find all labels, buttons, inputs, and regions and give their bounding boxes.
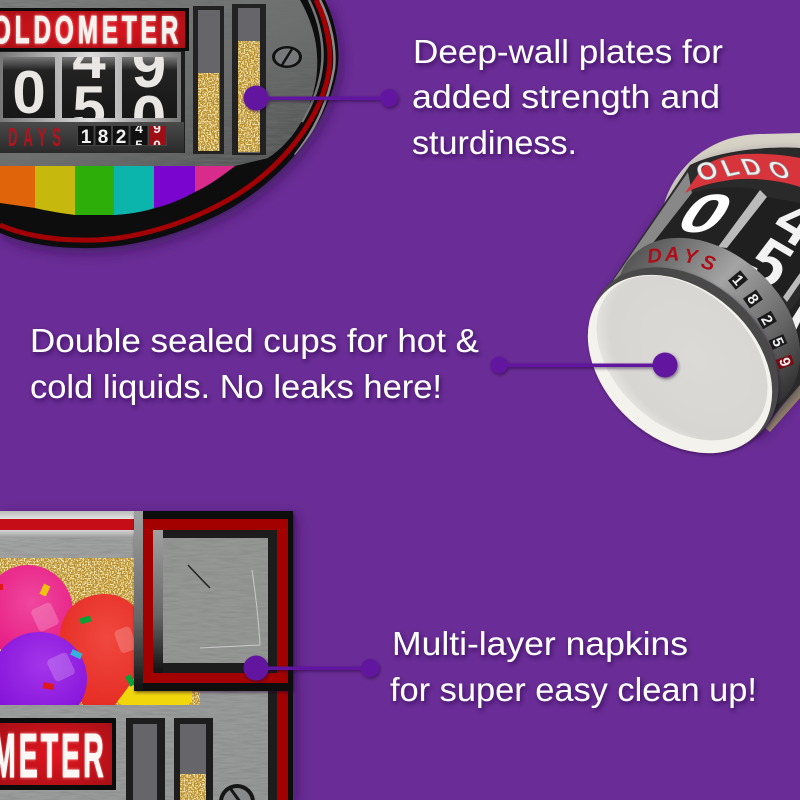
odometer digits xyxy=(0,52,181,122)
counter housing xyxy=(0,50,185,153)
text block xyxy=(412,33,723,161)
small counter: 5 xyxy=(768,335,787,349)
panel: cup xyxy=(587,133,800,456)
small counter: 0 xyxy=(153,137,161,153)
days label xyxy=(0,122,184,153)
odometer digits: 5 xyxy=(72,74,106,141)
balloon highlights xyxy=(30,601,138,683)
balloon: pink xyxy=(0,565,72,650)
text: DAYS: DAYS xyxy=(646,244,719,276)
cup rim xyxy=(660,133,800,228)
confetti xyxy=(0,584,136,690)
odometer digits: 4 xyxy=(72,24,106,91)
small counter: 9 xyxy=(153,120,161,136)
balloon: yellow xyxy=(117,680,192,705)
corner plate xyxy=(134,511,293,691)
small counter: 1 xyxy=(728,272,747,289)
tray frame xyxy=(0,511,293,800)
days band xyxy=(581,202,800,452)
small counter: 1 xyxy=(81,127,92,148)
text block: Deep-wall plates for xyxy=(413,33,723,70)
text: OLDO: O xyxy=(692,156,723,187)
small counter: 8 xyxy=(98,127,108,148)
small counter: 9 xyxy=(775,355,794,369)
plate rim xyxy=(0,0,338,248)
balloon: red xyxy=(60,594,134,705)
small counter: 4 xyxy=(135,120,143,136)
balloons xyxy=(0,565,192,705)
text block: Double sealed cups for hot & xyxy=(30,322,479,359)
gauge: left slot xyxy=(126,718,165,800)
text: OLDO: O xyxy=(764,157,795,185)
text block xyxy=(390,625,757,708)
text block: added strength and xyxy=(412,78,720,115)
odometer digits: 0 xyxy=(132,84,166,153)
icon: screw xyxy=(272,46,302,68)
gauge: right slot xyxy=(232,4,266,155)
panel: napkin set xyxy=(0,511,293,800)
connector line xyxy=(490,352,678,378)
cup base xyxy=(553,230,800,489)
gauge: left slot xyxy=(193,6,224,154)
small counter: 8 xyxy=(743,291,762,308)
text block xyxy=(30,322,479,405)
text: OLDO: L xyxy=(717,154,744,183)
red label xyxy=(685,154,800,193)
odometer digits: 0 xyxy=(12,59,46,126)
gauge: right slot xyxy=(174,718,213,800)
cup body xyxy=(603,148,800,434)
small counter: 2 xyxy=(116,127,126,148)
odometer digits: 9 xyxy=(132,32,166,101)
icon: screw xyxy=(219,784,255,800)
digit windows: 0 xyxy=(663,183,747,245)
text block: cold liquids. No leaks here! xyxy=(30,368,442,405)
small counter xyxy=(728,270,794,369)
rainbow strip xyxy=(0,165,237,217)
callout: plates xyxy=(244,33,723,161)
connector line xyxy=(244,656,379,680)
connector line xyxy=(244,86,398,110)
cup lower rim edge xyxy=(765,383,800,432)
small counter xyxy=(77,126,167,146)
text: OLDO: D xyxy=(737,154,766,181)
text block: sturdiness. xyxy=(412,124,577,161)
text: DAYS: DAYS xyxy=(8,123,67,152)
digit windows xyxy=(654,188,800,330)
metal face xyxy=(0,0,330,170)
panel: plate xyxy=(0,0,338,248)
text: OLDO xyxy=(692,154,795,187)
callout: napkins xyxy=(244,625,757,708)
glitter window xyxy=(0,558,200,705)
text block: for super easy clean up! xyxy=(390,671,757,708)
text block: Multi-layer napkins xyxy=(392,625,688,662)
small counter: 5 xyxy=(135,137,143,153)
small counter: 2 xyxy=(757,312,776,328)
callout: cups xyxy=(30,322,678,405)
balloon: purple xyxy=(0,632,87,705)
silver side strip xyxy=(610,172,692,285)
